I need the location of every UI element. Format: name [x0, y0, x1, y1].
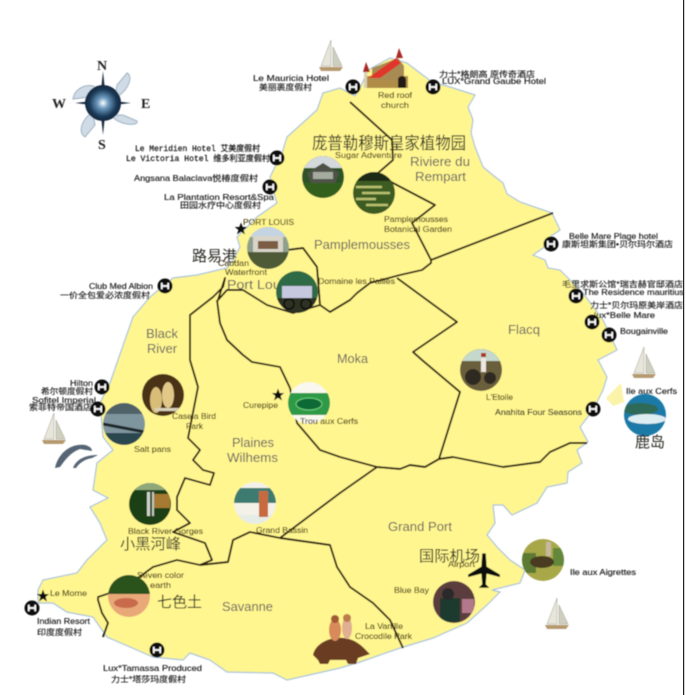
photo: Caudan Waterfront	[247, 227, 289, 269]
hotel labels: 康斯坦斯集团•贝尔玛尔酒店	[562, 239, 673, 249]
hotel labels: Anahita Four Seasons	[495, 408, 582, 417]
Chinese place names: 鹿岛	[635, 434, 665, 451]
region labels: Riviere du	[410, 154, 470, 169]
attraction labels	[50, 91, 677, 641]
attraction labels: Seven color	[137, 571, 184, 580]
compass rose: S	[98, 138, 106, 153]
hotel labels: The Residence mauritius	[583, 288, 684, 297]
attraction labels: Trou aux Cerfs	[300, 417, 358, 426]
compass rose	[52, 59, 150, 153]
photo: Ile aux Cerfs	[622, 394, 666, 436]
region labels: Pamplemousses	[314, 237, 410, 252]
photo: Domaine les Pailles	[276, 271, 318, 313]
hotel labels: Le Meridien Hotel 艾美度假村	[135, 143, 260, 154]
photo: Black River Gorges	[129, 483, 171, 525]
attraction labels: earth	[150, 581, 171, 590]
hotel labels: Hilton	[70, 379, 93, 388]
attraction labels: Waterfront	[225, 268, 268, 277]
region labels: Black	[146, 326, 178, 341]
region labels: Port Louis	[227, 277, 292, 292]
hotel labels: 毛里求斯公馆*瑞吉赫官邸酒店	[562, 279, 683, 289]
attraction labels: Botanical Garden	[384, 225, 452, 234]
attraction labels: Caudan	[218, 259, 249, 268]
attraction labels: Ile aux Aigrettes	[570, 568, 636, 577]
attraction labels: PORT LOUIS	[243, 218, 294, 227]
sailboat	[42, 413, 66, 444]
attraction labels: Domaine les Pailles	[318, 277, 395, 286]
airplane icon	[468, 553, 500, 588]
hotel labels: 印度度假村	[37, 627, 82, 637]
hotel labels: 力士*格朗高 原传奇酒店	[439, 69, 535, 79]
island map	[38, 58, 617, 680]
hotel labels: 田园水疗中心度假村	[180, 200, 261, 210]
hotel labels: Le Mauricia Hotel	[253, 74, 329, 83]
attraction labels: Le Morne	[50, 589, 88, 598]
hotel labels: Sofitel Imperial	[32, 396, 96, 405]
attraction labels: church	[381, 101, 409, 110]
right border line	[683, 0, 684, 695]
Chinese place names	[120, 134, 665, 611]
compass rose: E	[141, 97, 150, 112]
compass rose: W	[52, 97, 66, 112]
attraction labels: Pamplemousses	[384, 215, 448, 224]
hotel labels: Lux*Tamassa Produced	[103, 664, 202, 673]
hotel labels: LUX*Grand Gaube Hotel	[442, 77, 546, 86]
attraction labels: Black River Gorges	[128, 527, 203, 536]
hotel labels: Le Victoria Hotel 维多利亚度假村	[126, 153, 270, 164]
hotel labels: 一价全包爱必浓度假村	[60, 290, 150, 300]
attraction labels: Ile aux Cerfs	[626, 387, 677, 396]
attraction labels: Salt pans	[134, 445, 171, 454]
attraction labels: Blue Bay	[394, 586, 429, 595]
hotel labels: Belle Mare Plage hotel	[569, 232, 658, 241]
hotel labels: 力士*塔莎玛度假村	[111, 674, 186, 684]
Chinese place names: 国际机场	[419, 548, 480, 565]
hotel markers	[24, 80, 616, 658]
attraction labels: La Vanille	[365, 622, 404, 631]
star markers	[37, 222, 284, 602]
hotel labels: La Plantation Resort&Spa	[164, 193, 275, 202]
hotel labels: Angsana Balaclava悦椿度假村	[134, 173, 258, 183]
region labels: Grand Port	[388, 519, 452, 534]
photo: Grand Bassin	[234, 482, 276, 524]
road network	[98, 102, 587, 648]
hotel labels: 美丽裹度假村	[259, 82, 312, 92]
attraction labels: Airport	[448, 560, 476, 569]
photo: tortoise with children	[313, 614, 370, 664]
photo: Ile aux Aigrettes	[522, 539, 565, 581]
dolphins	[55, 445, 98, 468]
region labels: Rempart	[415, 169, 466, 184]
photo: Pamplemousses garden	[353, 172, 395, 214]
Chinese place names: 七色土	[157, 594, 202, 611]
region labels: Moka	[337, 351, 369, 366]
attraction labels: Grand Bassin	[256, 526, 308, 535]
attraction labels: Crocodile Park	[355, 632, 413, 641]
hotel labels: 力士*贝尔玛原美岸酒店	[590, 300, 683, 310]
attraction labels: Casela Bird	[172, 412, 216, 421]
Chinese place names: 庞普勒穆斯皇家植物园	[312, 134, 466, 153]
attraction labels: L'Etoile	[486, 393, 514, 402]
hotel labels: Indian Resort	[37, 617, 91, 626]
compass rose: N	[97, 59, 107, 74]
sailboat	[632, 347, 656, 378]
photo: Seven color earth	[108, 575, 150, 617]
attraction labels: Sugar Adventure	[335, 151, 403, 160]
hotel labels: Bougainville	[620, 327, 669, 336]
region labels: Flacq	[508, 322, 540, 337]
attraction labels: Curepipe	[243, 401, 279, 410]
small islet, Ile aux Cerfs	[606, 383, 624, 406]
region labels: Plaines	[232, 435, 274, 450]
sailboat	[319, 40, 343, 71]
red roof church	[363, 48, 408, 88]
attraction labels: Red roof	[378, 91, 413, 100]
photo: Casela Bird Park	[142, 374, 184, 416]
sailboat	[545, 598, 569, 629]
region labels	[146, 154, 540, 614]
photo: Trou aux Cerfs	[288, 382, 330, 424]
region labels: Savanne	[222, 599, 273, 614]
region labels: Wilhems	[227, 450, 279, 465]
Chinese place names: 路易港	[192, 248, 237, 265]
photo: Sugar Adventure	[302, 156, 344, 198]
hotel labels: lux*Belle Mare	[594, 311, 656, 320]
region labels: River	[147, 341, 178, 356]
Chinese place names: 小黑河峰	[120, 536, 181, 553]
attraction labels: Park	[186, 422, 204, 431]
hotel labels: 希尔顿度假村	[41, 386, 93, 396]
photo: Salt pans	[103, 403, 145, 445]
hotel labels: 索菲特帝国酒店	[29, 402, 92, 412]
photo: Blue Bay	[433, 581, 475, 623]
hotel labels: Club Med Albion	[89, 282, 153, 291]
photo: L'Etoile	[460, 349, 502, 391]
